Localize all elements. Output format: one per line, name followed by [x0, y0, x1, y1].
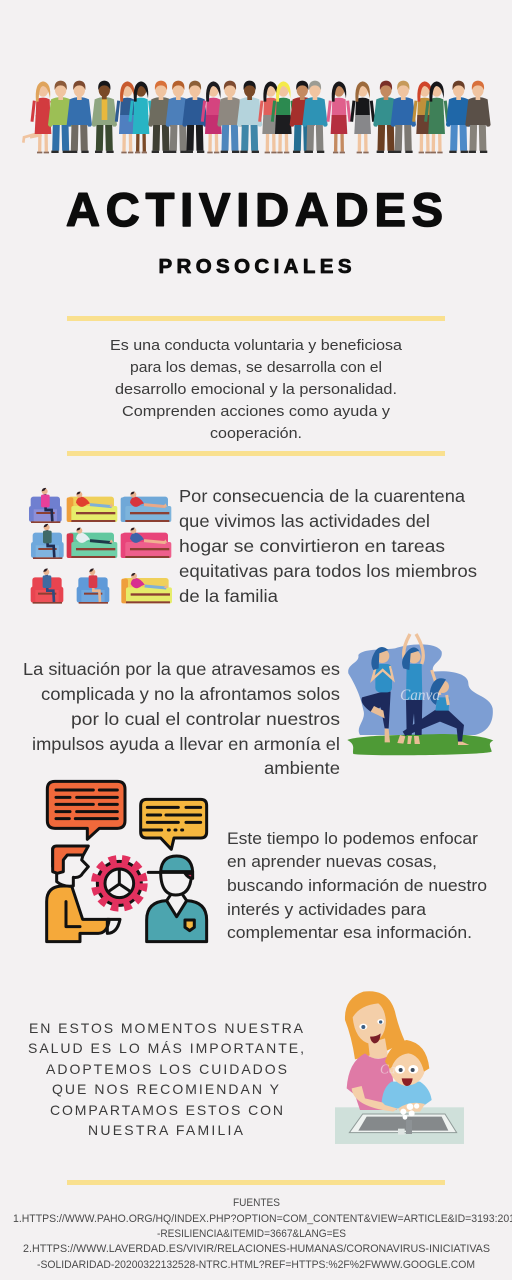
text block: household [179, 486, 477, 606]
illustration: people on sofas [29, 488, 172, 604]
illustration: mother and child washing hands [335, 991, 464, 1144]
gear [97, 861, 141, 905]
illustration: row of people [23, 81, 491, 153]
text block: health: EN ESTOS MOMENTOS NUESTRA [29, 1020, 304, 1036]
text block: sources: -SOLIDARIDAD-20200322132528-NTRC.HTML?REF=HTTPS:%2F%2FWWW.GOOGLE.COM [37, 1259, 475, 1271]
person: left [47, 886, 109, 942]
text block: health: COMPARTAMOS ESTOS CON [50, 1102, 283, 1118]
illustration: two people, speech bubbles and gear [47, 781, 207, 942]
text block: impulse control: impulsos ayuda a llevar en armonía el [32, 734, 340, 754]
text block: household: equitativas para todos los miembros [179, 561, 477, 581]
text block: learning: en aprender nuevas cosas, [227, 852, 437, 871]
text block: health: NUESTRA FAMILIA [88, 1122, 244, 1138]
text block: definition [110, 338, 403, 442]
text block: health: ADOPTEMOS LOS CUIDADOS [46, 1061, 287, 1077]
text block: learning: buscando información de nuestro [227, 876, 487, 895]
text block: sources: FUENTES [233, 1197, 280, 1209]
illustration: yoga [347, 634, 493, 755]
text block: impulse control [23, 659, 340, 778]
text block: learning: Este tiempo lo podemos enfocar [227, 829, 478, 848]
subtitle: PROSOCIALES [158, 255, 352, 278]
watermark: Ca [380, 1061, 396, 1076]
text block: definition: Es una conducta voluntaria y beneficiosa [110, 338, 403, 354]
text block: household: Por consecuencia de la cuarentena [179, 486, 465, 506]
text block: sources [13, 1197, 512, 1271]
text block: household: hogar se convirtieron en tareas [179, 536, 445, 556]
text block: learning: interés y actividades para [227, 900, 427, 919]
text block: impulse control: por lo cual el controlar nuestros [71, 709, 340, 729]
text block: household: de la familia [179, 586, 278, 606]
speech bubble: yellow [141, 799, 207, 849]
text block: health: QUE NOS RECOMIENDAN Y [52, 1081, 280, 1097]
text block: definition: desarrollo emocional y la personalidad. [115, 382, 397, 398]
text block: impulse control: ambiente [264, 758, 340, 778]
text block: definition: para los demas, se desarrolla con el [130, 360, 382, 376]
text block: learning: complementar esa información. [227, 923, 472, 942]
text block: definition: cooperación. [210, 426, 302, 442]
person: right [147, 901, 207, 942]
text block: sources: -RESILIENCIA&ITEMID=3667&LANG=ES [157, 1228, 346, 1240]
text block: impulse control: complicada y no la afrontamos solos [41, 684, 340, 704]
speech bubble: orange [47, 781, 125, 839]
text block: learning [227, 829, 487, 942]
text block: impulse control: La situación por la que atravesamos es [23, 659, 340, 679]
watermark: Canva [400, 687, 440, 704]
text block: sources: 2.HTTPS://WWW.LAVERDAD.ES/VIVIR/RELACIONES-HUMANAS/CORONAVIRUS-INICIATIVAS [23, 1243, 490, 1255]
text block: health [28, 1020, 304, 1138]
title: ACTIVIDADES [66, 183, 443, 236]
text block: health: SALUD ES LO MÁS IMPORTANTE, [28, 1040, 304, 1056]
text block: definition: Comprenden acciones como ayuda y [122, 404, 391, 420]
text block: household: que vivimos las actividades del [179, 511, 430, 531]
